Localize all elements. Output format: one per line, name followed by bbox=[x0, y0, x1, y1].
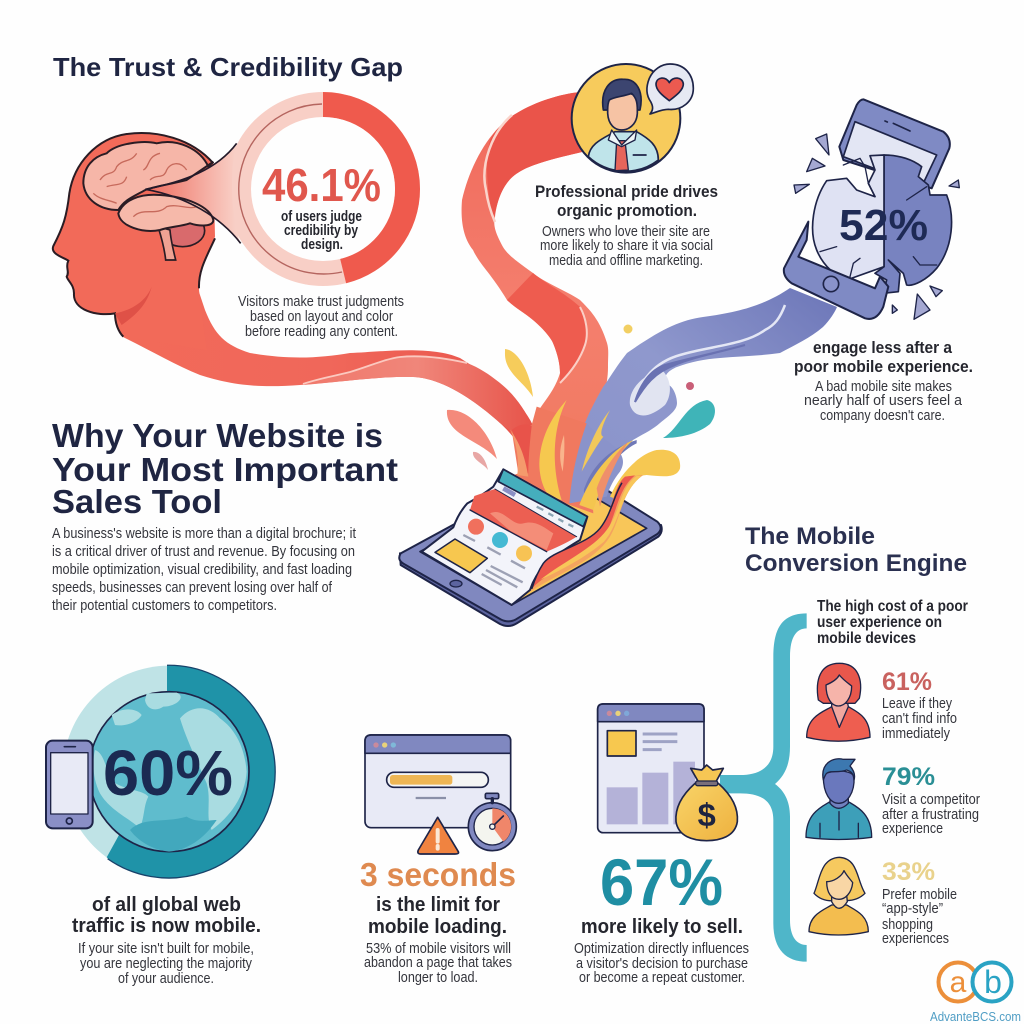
heading: professional pride: Professional pride drives bbox=[535, 182, 718, 201]
stat: 46.1 percent: credibility by bbox=[284, 222, 359, 239]
intro paragraph: mobile optimization, visual credibility, and fast loading bbox=[52, 562, 352, 578]
logo: AdvanteBCS: b bbox=[984, 964, 1002, 1000]
heading: global web traffic bbox=[72, 894, 261, 937]
stat: 52 percent: 52% bbox=[839, 201, 928, 250]
icon: woman red bbox=[807, 663, 870, 741]
body text: trust judgments: Visitors make trust judgments bbox=[238, 294, 404, 310]
stat: 33 percent: “app-style” bbox=[882, 901, 943, 917]
stat: 33 percent: shopping bbox=[882, 917, 933, 933]
head with brain bbox=[53, 133, 241, 350]
stat: 33 percent: 33% bbox=[882, 858, 935, 886]
heading: professional pride bbox=[535, 182, 718, 220]
stat: 46.1 percent: of users judge bbox=[281, 208, 362, 225]
heading: engage less: poor mobile experience. bbox=[794, 357, 973, 376]
icon: chart window with money bag: $ bbox=[698, 796, 716, 833]
intro paragraph: A business's website is more than a digital brochure; it bbox=[52, 526, 356, 542]
body text: bad mobile site bbox=[804, 379, 963, 424]
body text: abandon a page: abandon a page that takes bbox=[364, 955, 512, 971]
title: Why Your Website is bbox=[52, 417, 383, 454]
body text: bad mobile site: A bad mobile site makes bbox=[815, 379, 952, 395]
panel: mobile conversion engine heading: Conversion Engine bbox=[745, 550, 967, 577]
stat: 61 percent: Leave if they bbox=[882, 696, 953, 712]
stat: 79 percent: after a frustrating bbox=[882, 807, 979, 823]
splashes bbox=[447, 324, 715, 470]
icon: smartphone bbox=[46, 741, 93, 828]
logo: AdvanteBCS: a bbox=[950, 966, 967, 999]
panel: 60 percent mobile traffic bbox=[46, 665, 275, 987]
stat: 61 percent: can't find info bbox=[882, 711, 957, 727]
heading: engage less bbox=[794, 338, 973, 376]
icon: loading window with stopwatch and warning bbox=[365, 735, 516, 854]
body text: abandon a page: 53% of mobile visitors will bbox=[366, 941, 511, 957]
donut chart: 60 percent with globe bbox=[46, 665, 275, 878]
heading: more likely to sell: more likely to sell. bbox=[581, 916, 743, 938]
stat: 33 percent bbox=[882, 858, 957, 947]
tablet body bbox=[399, 465, 662, 626]
body text: bad mobile site: nearly half of users feel a bbox=[804, 393, 963, 409]
body text: owners share: more likely to share it via social bbox=[540, 238, 713, 254]
stat: 3 seconds: 3 seconds bbox=[360, 856, 516, 893]
heading: high cost: The high cost of a poor bbox=[817, 598, 968, 615]
panel: broken phone bbox=[784, 99, 973, 424]
icon: shattered phone bbox=[784, 99, 959, 319]
title: Sales Tool bbox=[52, 483, 222, 520]
body text: trust judgments: before reading any content. bbox=[245, 324, 398, 340]
heading: limit for mobile loading: is the limit for bbox=[376, 894, 500, 916]
body text: site for mobile: you are neglecting the majority bbox=[80, 956, 253, 972]
flowing ribbon: promotion to tablet bbox=[462, 92, 608, 487]
heading: professional pride: organic promotion. bbox=[557, 201, 697, 220]
stat: 79 percent: 79% bbox=[882, 763, 935, 791]
heading: high cost bbox=[817, 598, 968, 647]
heading: global web traffic: of all global web bbox=[92, 894, 241, 916]
stat: 33 percent: experiences bbox=[882, 931, 949, 947]
stat: 79 percent bbox=[882, 763, 980, 837]
website page bbox=[422, 469, 587, 605]
panel: tablet illustration bbox=[399, 400, 680, 626]
title: Your Most Important bbox=[52, 451, 398, 488]
heading: high cost: mobile devices bbox=[817, 630, 916, 647]
panel: trust and credibility gap bbox=[53, 52, 420, 350]
stat: 46.1 percent bbox=[262, 159, 381, 253]
icon: woman yellow bbox=[809, 857, 868, 935]
heading: engage less: engage less after a bbox=[813, 338, 952, 357]
icon: businessman with heart bubble bbox=[572, 64, 693, 173]
heading: limit for mobile loading bbox=[368, 894, 507, 938]
body text: bad mobile site: company doesn't care. bbox=[820, 408, 945, 424]
stat: 79 percent: Visit a competitor bbox=[882, 792, 980, 808]
intro paragraph: their potential customers to competitors. bbox=[52, 598, 277, 614]
body text: owners share: media and offline marketing. bbox=[549, 253, 703, 269]
panel: professional pride bbox=[535, 64, 718, 269]
donut chart: 46.1 percent bbox=[226, 92, 420, 286]
body text: optimization: or become a repeat customer. bbox=[579, 970, 745, 986]
stat: 79 percent: experience bbox=[882, 821, 943, 837]
panel: main title and intro bbox=[52, 417, 398, 614]
heading: trust and credibility gap: The Trust & Credibility Gap bbox=[53, 52, 403, 82]
body text: site for mobile bbox=[78, 941, 254, 987]
body text: owners share bbox=[540, 224, 713, 269]
icon: man teal bbox=[806, 759, 872, 839]
heading: global web traffic: traffic is now mobile. bbox=[72, 915, 261, 937]
body text: trust judgments bbox=[238, 294, 404, 340]
body text: site for mobile: If your site isn't built for mobile, bbox=[78, 941, 254, 957]
stat: 46.1 percent: 46.1% bbox=[262, 159, 381, 211]
panel: mobile conversion engine heading: The Mobile bbox=[745, 523, 875, 550]
flames behind the page bbox=[500, 400, 680, 513]
panel: mobile conversion engine heading bbox=[745, 523, 967, 577]
body text: site for mobile: of your audience. bbox=[118, 971, 214, 987]
logo: AdvanteBCS bbox=[930, 962, 1021, 1024]
flowing stripes over the page bbox=[531, 475, 643, 592]
body text: optimization: a visitor's decision to purchase bbox=[576, 956, 748, 972]
panel: high cost of poor experience bbox=[806, 598, 980, 947]
body text: optimization bbox=[574, 941, 749, 986]
stat: 67 percent: 67% bbox=[600, 845, 723, 919]
panel: 67 percent more likely to sell bbox=[574, 704, 749, 986]
body text: abandon a page bbox=[364, 941, 512, 986]
stat: 46.1 percent: design. bbox=[301, 236, 343, 253]
icon: chart window with money bag bbox=[598, 704, 737, 841]
stat: 61 percent: 61% bbox=[882, 668, 932, 696]
flowing ribbon: phone to tablet bbox=[570, 288, 837, 500]
ribbon light patch bbox=[630, 370, 670, 416]
cone to donut bbox=[145, 143, 241, 243]
body text: optimization: Optimization directly influences bbox=[574, 941, 749, 957]
heading: high cost: user experience on bbox=[817, 614, 942, 631]
heading: limit for mobile loading: mobile loading. bbox=[368, 916, 507, 938]
stat: 61 percent bbox=[882, 668, 957, 742]
panel: 3 seconds loading bbox=[360, 735, 516, 986]
body text: trust judgments: based on layout and color bbox=[250, 309, 393, 325]
body text: owners share: Owners who love their site are bbox=[542, 224, 710, 240]
intro paragraph bbox=[52, 526, 356, 614]
title bbox=[52, 417, 398, 520]
flowing ribbon: head to tablet bbox=[123, 280, 535, 457]
stat: 61 percent: immediately bbox=[882, 726, 951, 742]
bracket connector bbox=[720, 613, 807, 962]
intro paragraph: is a critical driver of trust and revenue. By focusing on bbox=[52, 544, 355, 560]
stat: 60 percent: 60% bbox=[103, 737, 233, 809]
body text: abandon a page: longer to load. bbox=[398, 970, 478, 986]
intro paragraph: speeds, businesses can prevent losing over half of bbox=[52, 580, 333, 596]
stat: 33 percent: Prefer mobile bbox=[882, 887, 957, 903]
